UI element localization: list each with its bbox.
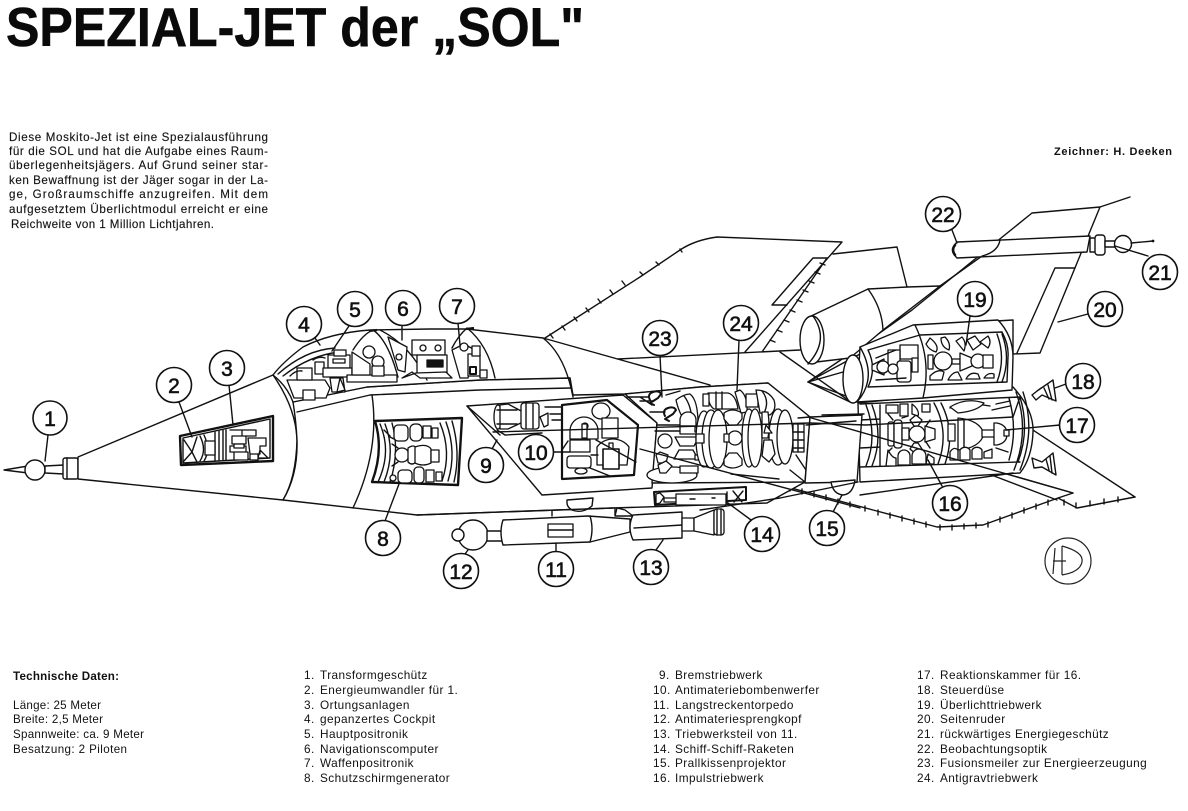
- rear hull block: [805, 414, 1073, 493]
- legend column 2: Antimateriebombenwerfer: [675, 683, 820, 697]
- callout 15: [810, 510, 844, 546]
- callout 6: [386, 290, 420, 326]
- forward fuselage: [78, 338, 810, 516]
- legend column 3: 23.: [917, 756, 935, 770]
- leader lines: [45, 230, 1148, 554]
- callout 15: 15: [815, 518, 839, 541]
- overlight engine internals: [872, 336, 994, 382]
- legend column 1: [304, 668, 458, 785]
- legend column 1: 7.: [304, 756, 315, 770]
- legend column 3: Antigravtriebwerk: [940, 771, 1038, 785]
- upper jet pod: [800, 247, 982, 364]
- technical data: Breite: 2,5 Meter: [13, 713, 103, 726]
- legend column 1: 2.: [304, 683, 315, 697]
- legend column 3: Seitenruder: [940, 712, 1006, 726]
- technical data: Technische Daten:: [13, 670, 119, 683]
- callout 19: [958, 282, 992, 316]
- weapon pod: hull and pylons: [417, 508, 630, 545]
- callout 4: [286, 306, 322, 342]
- legend column 1: Transformgeschütz: [320, 668, 428, 682]
- callout 8: [366, 520, 400, 556]
- intro text block: [9, 131, 268, 231]
- technical data: Spannweite: ca. 9 Meter: [13, 728, 144, 741]
- fusion and antigrav section: [625, 383, 810, 483]
- callout 14: 14: [750, 524, 774, 547]
- callout 3: 3: [221, 358, 233, 381]
- callout 18: [1066, 364, 1100, 398]
- cockpit instruments: [287, 337, 487, 400]
- callout 10: 10: [524, 442, 548, 465]
- callout 8: 8: [377, 528, 389, 551]
- legend column 2: 15.: [653, 756, 671, 770]
- legend column 1: Navigationscomputer: [320, 742, 439, 756]
- callout 2: [156, 368, 192, 402]
- shield generator bay: [372, 418, 462, 485]
- callout 20: [1088, 292, 1122, 326]
- icon: artist monogram HD: [1045, 538, 1091, 584]
- legend column 3: Beobachtungsoptik: [940, 742, 1048, 756]
- legend column 2: 9.: [659, 668, 670, 682]
- legend column 3: Steuerdüse: [940, 683, 1005, 697]
- legend column 3: Überlichttriebwerk: [940, 698, 1042, 712]
- legend column 3: 22.: [917, 742, 935, 756]
- callout 1: [33, 401, 67, 435]
- callout 10: [518, 434, 554, 470]
- callout 22: [926, 196, 960, 232]
- optics tube and rear gun: [953, 235, 1154, 258]
- callout 16: 16: [938, 493, 962, 516]
- callout 9: [468, 448, 504, 482]
- callout 12: [444, 554, 478, 588]
- callout 19: 19: [963, 289, 987, 312]
- callout 16: [932, 486, 968, 520]
- main upper wing: [545, 237, 848, 400]
- callout 7: [440, 288, 474, 324]
- legend column 1: Energieumwandler für 1.: [320, 683, 458, 697]
- legend column 2: [653, 668, 820, 785]
- callout 17: 17: [1065, 415, 1089, 438]
- callout 3: [210, 350, 244, 386]
- callout 11: [538, 552, 574, 586]
- intro text block: ken Bewaffnung ist der Jäger sogar in der La-: [9, 174, 268, 187]
- callout 12: 12: [449, 561, 473, 584]
- callout 13: [634, 550, 668, 584]
- long-range torpedo bay: [654, 487, 746, 505]
- legend column 2: 16.: [653, 771, 671, 785]
- lower delta wing: [780, 417, 1135, 530]
- nose spike and ball: [4, 458, 78, 480]
- legend column 2: Langstreckentorpedo: [675, 698, 794, 712]
- equipment bay: transform gun and optics: [180, 416, 273, 465]
- legend column 2: Antimateriesprengkopf: [675, 712, 802, 726]
- legend column 1: 3.: [304, 698, 315, 712]
- callout 22: 22: [931, 204, 955, 227]
- callout 21: 21: [1148, 262, 1172, 285]
- callout 2: 2: [168, 375, 180, 398]
- canopy: [273, 328, 573, 402]
- wedge panel with brake thruster and bomb launcher: [467, 395, 657, 495]
- legend column 2: 11.: [653, 698, 670, 712]
- legend column 3: 18.: [917, 683, 935, 697]
- weapon pod: warhead: [452, 520, 503, 550]
- intro text block: Reichweite von 1 Million Lichtjahren.: [11, 218, 214, 231]
- callout 1: 1: [44, 408, 56, 431]
- intro text block: für die SOL und hat die Aufgabe eines Raum-: [9, 145, 268, 158]
- engine nozzles: [1032, 380, 1056, 475]
- legend column 3: 20.: [917, 712, 935, 726]
- legend column 2: Impulstriebwerk: [675, 771, 764, 785]
- legend column 1: Hauptpositronik: [320, 727, 408, 741]
- callout 7: 7: [451, 296, 463, 319]
- brake thruster: [494, 403, 562, 429]
- overlight engine pod: [808, 320, 1013, 403]
- tail fin: [808, 197, 1130, 402]
- callout 14: [744, 516, 780, 552]
- legend column 1: Schutzschirmgenerator: [320, 771, 450, 785]
- callout 20: 20: [1093, 299, 1117, 322]
- legend column 2: Bremstriebwerk: [675, 668, 763, 682]
- legend column 2: 13.: [653, 727, 671, 741]
- legend column 1: 6.: [304, 742, 315, 756]
- bomb launcher: [562, 403, 636, 476]
- credit: illustrator: Zeichner: H. Deeken: [1054, 146, 1172, 158]
- callout 17: [1060, 408, 1094, 442]
- legend column 3: [917, 668, 1147, 785]
- legend column 1: Waffenpositronik: [320, 756, 414, 770]
- technical data: Besatzung: 2 Piloten: [13, 743, 127, 756]
- overlay wing lines: [493, 397, 1020, 510]
- legend column 2: 10.: [653, 683, 671, 697]
- callout 24: 24: [729, 313, 753, 336]
- callout 18: 18: [1071, 371, 1095, 394]
- callout 21: [1142, 254, 1178, 290]
- reactor internals: [886, 401, 1010, 466]
- legend column 3: 17.: [917, 668, 935, 682]
- legend column 3: 21.: [917, 727, 935, 741]
- legend column 2: 14.: [653, 742, 671, 756]
- callout 13: 13: [639, 557, 663, 580]
- fusion reactor: [627, 391, 701, 483]
- legend column 1: 4.: [304, 712, 315, 726]
- intro text block: ge, Großraumschiffe anzugreifen. Mit dem: [9, 188, 268, 201]
- legend column 1: 5.: [304, 727, 315, 741]
- lower engine housing: [858, 387, 1033, 482]
- antigrav drive: [696, 390, 810, 482]
- intro text block: überlegenheitsjägers. Auf Grund seiner star-: [9, 159, 268, 172]
- legend column 1: Ortungsanlagen: [320, 698, 410, 712]
- weapon pod: engine section: [630, 509, 724, 540]
- legend column 2: Triebwerksteil von 11.: [675, 727, 798, 741]
- callout 23: 23: [648, 328, 672, 351]
- cushion projectors: [567, 480, 855, 511]
- legend column 3: 24.: [917, 771, 935, 785]
- legend column 1: 1.: [304, 668, 315, 682]
- intro text block: Diese Moskito-Jet ist eine Spezialausführung: [9, 131, 268, 144]
- legend column 2: 12.: [653, 712, 671, 726]
- legend column 1: gepanzertes Cockpit: [320, 712, 436, 726]
- callout 23: [642, 320, 678, 356]
- callout 9: 9: [480, 455, 492, 478]
- callout 6: 6: [397, 298, 409, 321]
- callout 4: 4: [298, 314, 310, 337]
- callout 5: 5: [349, 299, 361, 322]
- legend column 2: Schiff-Schiff-Raketen: [675, 742, 794, 756]
- legend column 1: 8.: [304, 771, 315, 785]
- legend column 2: Prallkissenprojektor: [675, 756, 786, 770]
- jet illustration: [4, 197, 1154, 550]
- legend column 3: Fusionsmeiler zur Energieerzeugung: [940, 756, 1147, 770]
- intro text block: aufgesetztem Überlichtmodul erreicht er eine: [9, 203, 268, 216]
- legend column 3: rückwärtiges Energiegeschütz: [940, 727, 1109, 741]
- legend column 3: Reaktionskammer für 16.: [940, 668, 1081, 682]
- technical data: Länge: 25 Meter: [13, 699, 101, 712]
- callout 11: 11: [545, 559, 567, 582]
- technical data: [13, 670, 144, 756]
- callout 5: [338, 292, 372, 326]
- callout 24: [724, 306, 758, 340]
- legend column 3: 19.: [917, 698, 935, 712]
